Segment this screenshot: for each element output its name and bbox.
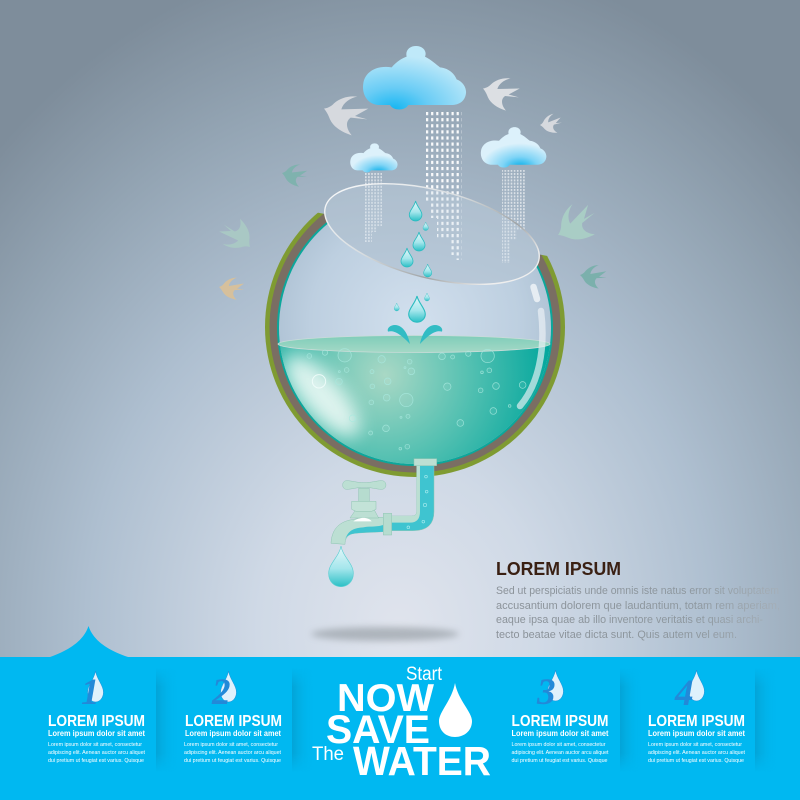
bird: teal right [579,264,609,291]
water surface [278,336,550,352]
step 4 text [648,742,746,764]
glass lip [315,165,549,303]
pipe top collar [414,459,437,466]
step 4 icon: 4 [674,673,694,714]
drop 4 [401,248,413,267]
step 3 subtitle: Lorem ipsum dolor sit amet [512,729,609,738]
step 2 subtitle: Lorem ipsum dolor sit amet [185,729,281,738]
body text: eaque ipsa quae ab illo inventore veritatis et quasi archi- [496,614,763,626]
valve hex [352,501,376,511]
bird: small right [538,112,565,137]
spout [331,517,383,544]
rain: left cloud [365,173,382,242]
drop 5 [424,264,432,277]
bird: teal left [281,164,308,188]
pipe bubbles [407,475,428,529]
main title [312,664,491,784]
bird: top right [483,78,520,111]
title: SAVE: SAVE [326,708,430,752]
splash [388,325,442,344]
water body [280,344,550,464]
title: NOW: NOW [337,677,435,720]
valve neck [350,509,379,518]
bird: pale green left [215,213,259,256]
text block [496,558,780,641]
step 3 title: LOREM IPSUM [512,713,608,730]
collar [383,513,392,535]
step 1 icon: 1 [81,672,100,713]
rain: centre cloud [426,112,462,260]
bird: tan [218,277,246,302]
bubbles [307,349,526,450]
step 1 text: dui pretium ut feugiat est varius. Quisque [48,758,144,764]
step 1 text: Lorem ipsum dolor sit amet, consectetur [48,742,142,748]
title: Start: Start [406,664,443,685]
body text: Sed ut perspiciatis unde omnis iste natus error sit voluptatem [496,585,779,597]
drop 7 [424,293,430,301]
birds [215,78,609,302]
step 2 text: Lorem ipsum dolor sit amet, consectetur [184,742,278,748]
step 4 title: LOREM IPSUM [648,713,745,730]
ground shadow [311,627,459,641]
spout water [345,525,383,540]
glass shine [520,287,542,406]
card shadows [156,674,766,766]
drop 3 [413,232,425,251]
step 3 text: adipiscing elit. Aenean auctor arcu aliquet [512,750,609,756]
drop 8 [394,303,399,311]
body text: tecto beatae vitae dicta sunt. Quis autem vel eum. [496,629,737,641]
step 2 text: dui pretium ut feugiat est varius. Quisque [184,758,281,764]
water highlight [281,347,370,448]
step 3 text [512,742,609,764]
spout highlight [353,518,372,521]
faucet [329,459,437,587]
step 3 text: dui pretium ut feugiat est varius. Quisque [512,758,608,764]
body text: accusantium dolorem que laudantium, totam rem aperiam, [496,600,780,612]
step 1 title: LOREM IPSUM [48,713,145,730]
bowl ring [265,212,565,477]
step 1 text: adipiscing elit. Aenean auctor arcu aliquet [48,750,146,756]
falling drops [394,201,432,322]
cloud: left small [350,143,398,172]
cloud: right [481,127,546,168]
body text [496,585,780,641]
step 1 subtitle: Lorem ipsum dolor sit amet [48,729,145,738]
bird: top left [324,96,368,135]
drop 1 [409,201,422,221]
title: WATER: WATER [353,738,491,784]
step 4 text: dui pretium ut feugiat est varius. Quisque [648,758,744,764]
text heading: LOREM IPSUM [496,558,621,579]
step 1 [48,671,146,764]
title drop icon [439,683,472,737]
step 3 text: Lorem ipsum dolor sit amet, consectetur [512,742,606,748]
drop 6 [409,296,425,322]
title: The: The [312,744,344,765]
faucet drop [329,546,353,587]
pipe light side [388,460,420,523]
valve stem [359,488,369,502]
step 4 [648,670,746,764]
pipe [388,460,434,531]
step 3 [512,670,609,764]
glass bowl [265,165,565,477]
rain: right cloud [502,170,525,263]
step 4 subtitle: Lorem ipsum dolor sit amet [648,729,745,738]
bird: pale green right [550,197,606,253]
step 2 [184,671,282,764]
valve handle [343,481,386,489]
blue footer band [0,626,800,800]
step 2 title: LOREM IPSUM [185,713,282,730]
step 4 text: Lorem ipsum dolor sit amet, consectetur [648,742,742,748]
step 2 text: adipiscing elit. Aenean auctor arcu aliquet [184,750,282,756]
step 4 text: adipiscing elit. Aenean auctor arcu aliquet [648,750,746,756]
step 2 text [184,742,282,764]
drop 2 [423,222,428,231]
step 1 text [48,742,146,764]
cloud: large [363,46,466,109]
step 3 icon: 3 [536,672,556,713]
step 2 icon: 2 [211,672,230,713]
